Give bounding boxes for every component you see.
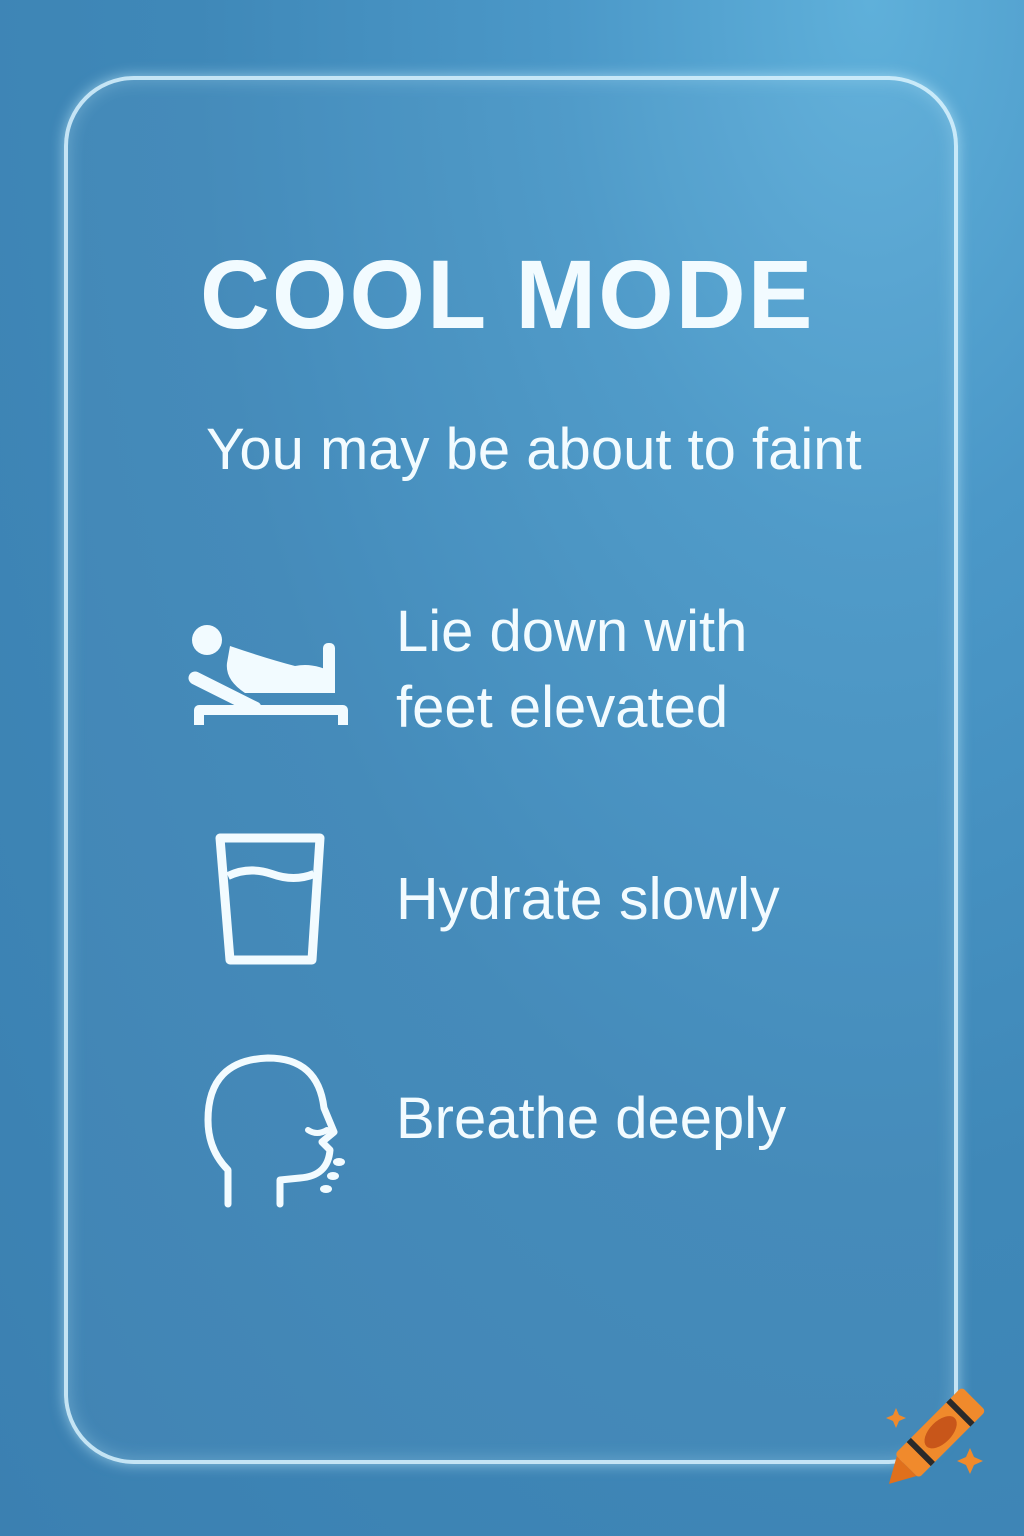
text: lie down: feet elevated: [396, 675, 728, 740]
icon: glass of water: [216, 834, 324, 964]
subtitle: You may be about to faint: [206, 417, 862, 482]
text: hydrate: Hydrate slowly: [396, 866, 780, 932]
text: lie down: Lie down with: [396, 599, 747, 664]
title: COOL MODE: [200, 240, 814, 349]
icon: head breathing: [204, 1054, 345, 1208]
icon: crayon logo: [886, 1388, 984, 1484]
text: breathe: Breathe deeply: [396, 1086, 786, 1151]
icon: person lying down: [188, 625, 348, 725]
text: lie down: [396, 599, 747, 740]
panel: glass card: [64, 76, 958, 1464]
